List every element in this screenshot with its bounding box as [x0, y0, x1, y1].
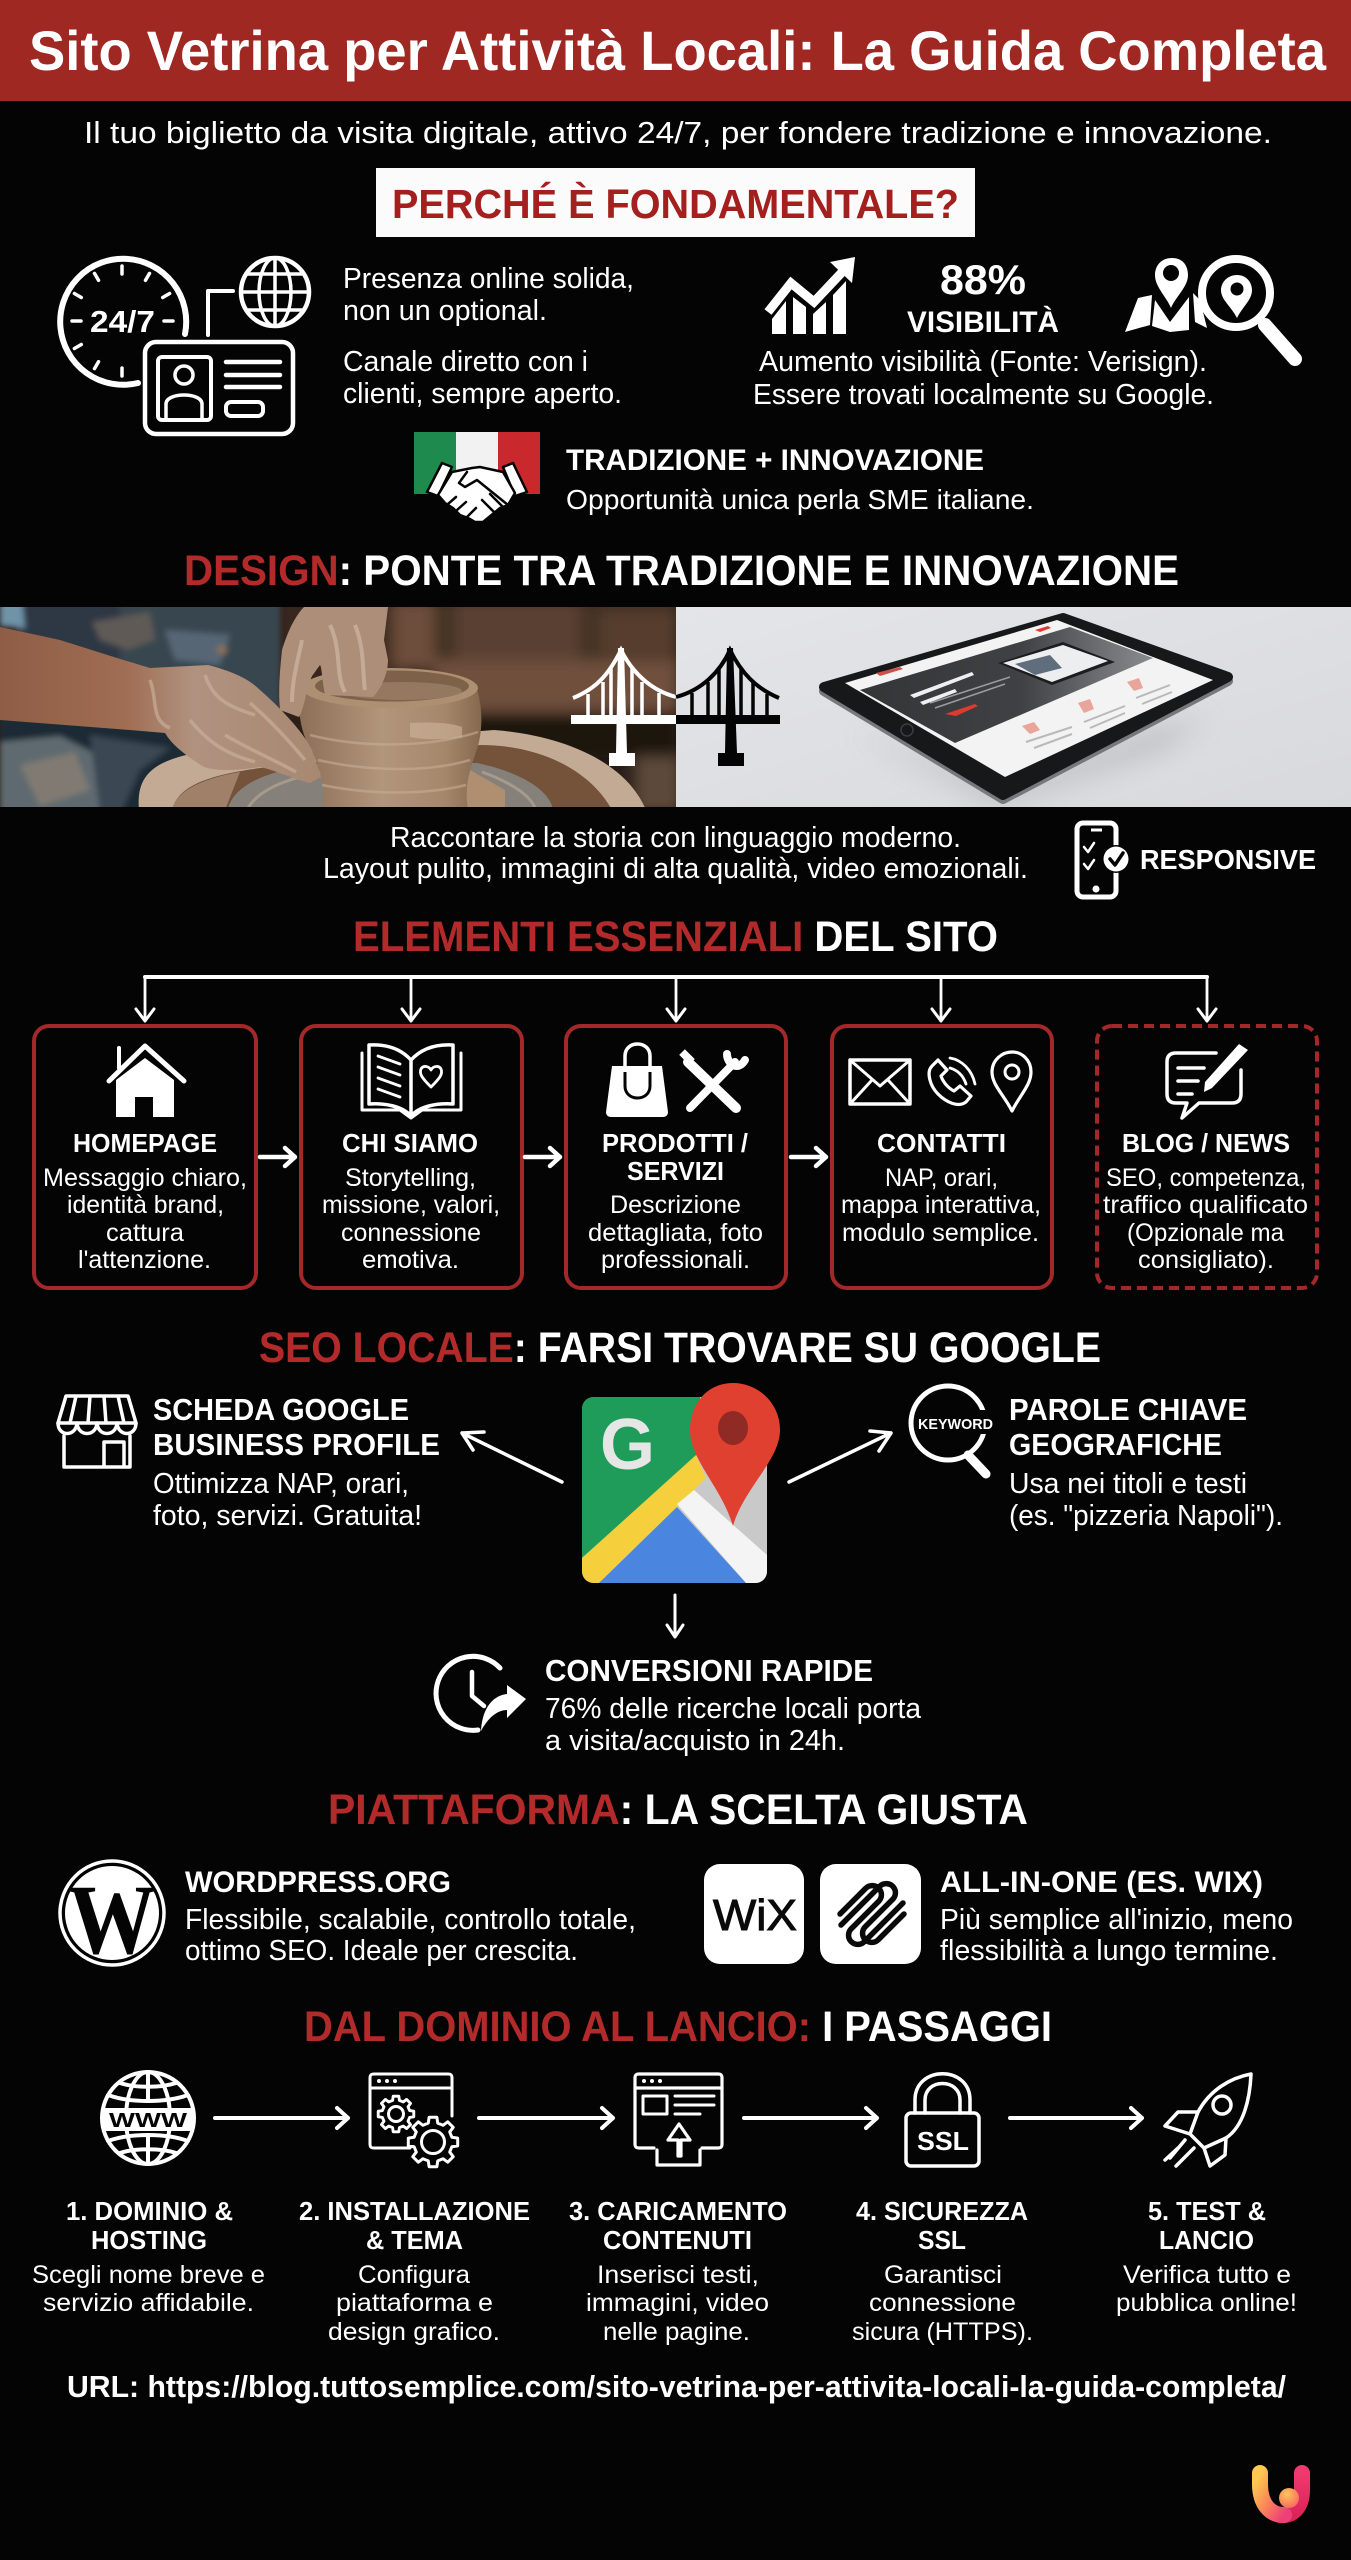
step 5: test e lancio: LANCIO: [1159, 2225, 1254, 2255]
card: prodotti e servizi: PRODOTTI /: [602, 1128, 748, 1158]
step 5: test e lancio: Verifica tutto e: [1123, 2261, 1291, 2289]
icon: google maps logo: G: [600, 1405, 655, 1485]
heading: dal dominio al lancio: DAL DOMINIO AL LANCIO: I PASSAGGI: [304, 2003, 1052, 2051]
text: tradizione + innovazione: TRADIZIONE + INNOVAZIONE: [566, 444, 984, 477]
text: parole chiave geografiche: (es. "pizzeria Napoli").: [1009, 1500, 1283, 1532]
text: presenza online: clienti, sempre aperto.: [343, 378, 622, 410]
text: raccontare la storia: [323, 822, 1028, 885]
arrow: step 2 to step 3: [479, 2108, 613, 2128]
text: visibilità: Essere trovati localmente su Google.: [753, 379, 1214, 411]
icon: window with upload: [635, 2074, 722, 2165]
card: prodotti e servizi: SERVIZI: [627, 1156, 724, 1186]
step 1: dominio e hosting: [32, 2072, 265, 2317]
step 4: sicurezza ssl: connessione: [869, 2289, 1016, 2317]
text: raccontare la storia: Raccontare la storia con linguaggio moderno.: [390, 822, 961, 854]
card: blog e news: SEO, competenza,: [1106, 1164, 1306, 1192]
text: presenza online: Canale diretto con i: [343, 346, 588, 378]
text: scheda google business profile: [153, 1392, 440, 1532]
card: chi siamo: CHI SIAMO: [342, 1128, 478, 1158]
card: homepage: l'attenzione.: [78, 1246, 211, 1274]
step 2: installazione e tema: piattaforma e: [336, 2289, 493, 2317]
step 3: caricamento contenuti: [569, 2074, 787, 2346]
icon: www globe: WWW: [109, 2110, 187, 2132]
url: URL: https://blog.tuttosemplice.com/sito-vetrina-per-attivita-locali-la-guida-completa/: [67, 2369, 1286, 2404]
heading: elementi essenziali: ELEMENTI ESSENZIALI DEL SITO: [353, 913, 998, 961]
text: all-in-one: [940, 1866, 1293, 1967]
text: scheda google business profile: Ottimizza NAP, orari,: [153, 1468, 409, 1500]
text: tradizione + innovazione: [566, 444, 1034, 515]
photo: potter's hands on clay: [0, 600, 680, 815]
text: wordpress.org: WORDPRESS.ORG: [185, 1866, 451, 1899]
card: chi siamo: connessione: [341, 1219, 481, 1247]
arrow: homepage to chi siamo: [260, 1148, 295, 1166]
text: visibilità: [753, 346, 1214, 411]
card: contatti: mappa interattiva,: [841, 1191, 1041, 1219]
stat: 88% visibilità: [907, 256, 1059, 339]
icon: keyword magnifier: [911, 1386, 995, 1474]
label: responsive: RESPONSIVE: [1140, 844, 1316, 875]
photo: tablet with website: [676, 607, 1351, 807]
card: prodotti e servizi: professionali.: [601, 1246, 750, 1274]
icon: google maps logo: [582, 1383, 780, 1583]
subtitle: Il tuo biglietto da visita digitale, attivo 24/7, per fondere tradizione e innovazione.: [84, 115, 1272, 150]
step 3: caricamento contenuti: Inserisci testi,: [597, 2261, 759, 2289]
text: parole chiave geografiche: PAROLE CHIAVE: [1009, 1392, 1247, 1427]
card: contatti: CONTATTI: [877, 1128, 1006, 1158]
step 1: dominio e hosting: servizio affidabile.: [43, 2289, 254, 2317]
step 5: test e lancio: pubblica online!: [1116, 2289, 1297, 2317]
icon: responsive phone: [1077, 823, 1130, 897]
text: visibilità: Aumento visibilità (Fonte: Verisign).: [759, 346, 1207, 378]
icon: keyword magnifier: KEYWORD: [918, 1416, 993, 1433]
text: presenza online: [343, 263, 634, 410]
icon: www globe: [100, 2072, 196, 2164]
icon: open book with heart: [362, 1045, 461, 1118]
text: scheda google business profile: BUSINESS PROFILE: [153, 1427, 440, 1462]
text: parole chiave geografiche: Usa nei titoli e testi: [1009, 1468, 1247, 1500]
stat: 88% visibilità: 88%: [940, 256, 1026, 303]
card: homepage: Messaggio chiaro,: [43, 1164, 247, 1192]
arrow: to conversioni: [667, 1595, 683, 1637]
text: parole chiave geografiche: GEOGRAFICHE: [1009, 1427, 1222, 1462]
icon: envelope: [850, 1060, 910, 1104]
card: contatti: NAP, orari,: [885, 1164, 998, 1192]
step 5: test e lancio: 5. TEST &: [1148, 2196, 1266, 2226]
icon: ssl padlock: SSL: [917, 2126, 969, 2156]
card: homepage: identità brand,: [67, 1191, 224, 1219]
text: all-in-one: flessibilità a lungo termine.: [940, 1935, 1278, 1967]
icon: chat bubble with pencil: [1167, 1044, 1248, 1118]
icon: wrench and screwdriver: [679, 1049, 745, 1108]
text: raccontare la storia: Layout pulito, immagini di alta qualità, video emozionali.: [323, 853, 1028, 885]
card: blog e news: traffico qualificato: [1103, 1191, 1308, 1219]
text: parole chiave geografiche: [1009, 1392, 1283, 1532]
text: conversioni rapide: 76% delle ricerche locali porta: [545, 1693, 922, 1725]
text: tradizione + innovazione: Opportunità unica perla SME italiane.: [566, 484, 1034, 515]
step 3: caricamento contenuti: nelle pagine.: [603, 2318, 750, 2346]
heading: seo locale: SEO LOCALE: FARSI TROVARE SU GOOGLE: [259, 1324, 1101, 1372]
step 2: installazione e tema: Configura: [358, 2261, 470, 2289]
text: all-in-one: Più semplice all'inizio, meno: [940, 1904, 1293, 1936]
icon: phone: [929, 1058, 975, 1104]
icon: clock, globe and ID card: [60, 258, 309, 434]
card: homepage: cattura: [106, 1219, 184, 1247]
text: all-in-one: ALL-IN-ONE (ES. WIX): [940, 1866, 1263, 1899]
step 3: caricamento contenuti: 3. CARICAMENTO: [569, 2196, 787, 2226]
arrow: step 3 to step 4: [744, 2108, 877, 2128]
icon: wix logo: WiX: [713, 1891, 797, 1940]
icon: rocket: [1165, 2074, 1251, 2166]
text: conversioni rapide: a visita/acquisto in 24h.: [545, 1725, 845, 1757]
card: blog e news: [1097, 1026, 1317, 1288]
step 2: installazione e tema: & TEMA: [366, 2225, 463, 2255]
icon: storefront: [58, 1396, 136, 1467]
card: homepage: [34, 1026, 256, 1288]
icon: house: [109, 1046, 184, 1117]
step 3: caricamento contenuti: immagini, video: [586, 2289, 769, 2317]
text: presenza online: non un optional.: [343, 295, 547, 327]
step 2: installazione e tema: design grafico.: [328, 2318, 500, 2346]
arrow: to parole chiave: [789, 1431, 891, 1482]
icon: wix logo: [704, 1864, 804, 1964]
icon: wordpress logo: W: [68, 1864, 156, 1975]
icon: shopping bag: [606, 1044, 668, 1117]
icon: growth chart: [768, 257, 855, 334]
step 2: installazione e tema: [299, 2074, 530, 2346]
card: prodotti e servizi: dettagliata, foto: [588, 1219, 763, 1247]
arrow: to google business profile: [462, 1432, 562, 1482]
step 2: installazione e tema: 2. INSTALLAZIONE: [299, 2196, 530, 2226]
text: presenza online: Presenza online solida,: [343, 263, 634, 295]
step 3: caricamento contenuti: CONTENUTI: [603, 2225, 752, 2255]
icon: italian flag with handshake: [414, 432, 540, 522]
step 4: sicurezza ssl: 4. SICUREZZA: [856, 2196, 1028, 2226]
title banner: [0, 0, 1351, 101]
card: chi siamo: [301, 1026, 522, 1288]
arrow: chi siamo to prodotti: [525, 1148, 560, 1166]
card: chi siamo: Storytelling,: [345, 1164, 476, 1192]
step 1: dominio e hosting: 1. DOMINIO &: [66, 2196, 233, 2226]
step 4: sicurezza ssl: sicura (HTTPS).: [852, 2318, 1033, 2346]
step 4: sicurezza ssl: Garantisci: [884, 2261, 1002, 2289]
text: scheda google business profile: foto, servizi. Gratuita!: [153, 1500, 422, 1532]
icon: half white half black bridge: [571, 648, 780, 766]
icon: map and magnifier: [1125, 255, 1295, 359]
icon: squarespace logo: [820, 1864, 921, 1964]
card: chi siamo: emotiva.: [362, 1246, 459, 1274]
step 4: sicurezza ssl: SSL: [918, 2225, 966, 2255]
heading: perché è fondamentale: PERCHÉ È FONDAMENTALE?: [392, 181, 959, 227]
icon: window with gears: [370, 2074, 458, 2167]
icon: location pin: [992, 1052, 1031, 1111]
card: chi siamo: missione, valori,: [322, 1191, 500, 1219]
text: wordpress.org: ottimo SEO. Ideale per crescita.: [185, 1935, 578, 1967]
card: blog e news: BLOG / NEWS: [1122, 1128, 1290, 1158]
card: prodotti e servizi: [566, 1026, 786, 1288]
text: conversioni rapide: [545, 1653, 922, 1757]
heading: design: DESIGN: PONTE TRA TRADIZIONE E INNOVAZIONE: [184, 547, 1179, 595]
stat: 88% visibilità: VISIBILITÀ: [907, 305, 1059, 339]
step 5: test e lancio: [1116, 2074, 1297, 2317]
arrows: bracket into the five cards: [136, 977, 1216, 1021]
arrow: step 1 to step 2: [215, 2108, 348, 2128]
title banner: Sito Vetrina per Attività Locali: La Guida Completa: [29, 19, 1327, 82]
icon: clock with arrow: [436, 1656, 526, 1731]
heading: piattaforma: PIATTAFORMA: LA SCELTA GIUSTA: [328, 1786, 1028, 1834]
card: blog e news: (Opzionale ma: [1127, 1219, 1284, 1247]
text: wordpress.org: Flessibile, scalabile, controllo totale,: [185, 1904, 636, 1936]
arrow: step 4 to step 5: [1010, 2108, 1142, 2128]
icon: clock, globe and ID card: 24/7: [90, 304, 155, 339]
step 1: dominio e hosting: Scegli nome breve e: [32, 2261, 265, 2289]
text: wordpress.org: [185, 1866, 636, 1967]
card: blog e news: consigliato).: [1138, 1246, 1274, 1274]
step 4: sicurezza ssl: [852, 2074, 1033, 2346]
card: prodotti e servizi: Descrizione: [610, 1191, 741, 1219]
heading: perché è fondamentale: [376, 168, 975, 237]
step 1: dominio e hosting: HOSTING: [91, 2225, 207, 2255]
text: scheda google business profile: SCHEDA GOOGLE: [153, 1392, 409, 1427]
icon: ssl padlock: [906, 2074, 979, 2166]
card: homepage: HOMEPAGE: [73, 1128, 217, 1158]
card: contatti: modulo semplice.: [842, 1219, 1039, 1247]
arrow: prodotti to contatti: [791, 1148, 826, 1166]
card: contatti: [832, 1026, 1052, 1288]
text: conversioni rapide: CONVERSIONI RAPIDE: [545, 1653, 873, 1688]
logo: [1260, 2473, 1302, 2515]
